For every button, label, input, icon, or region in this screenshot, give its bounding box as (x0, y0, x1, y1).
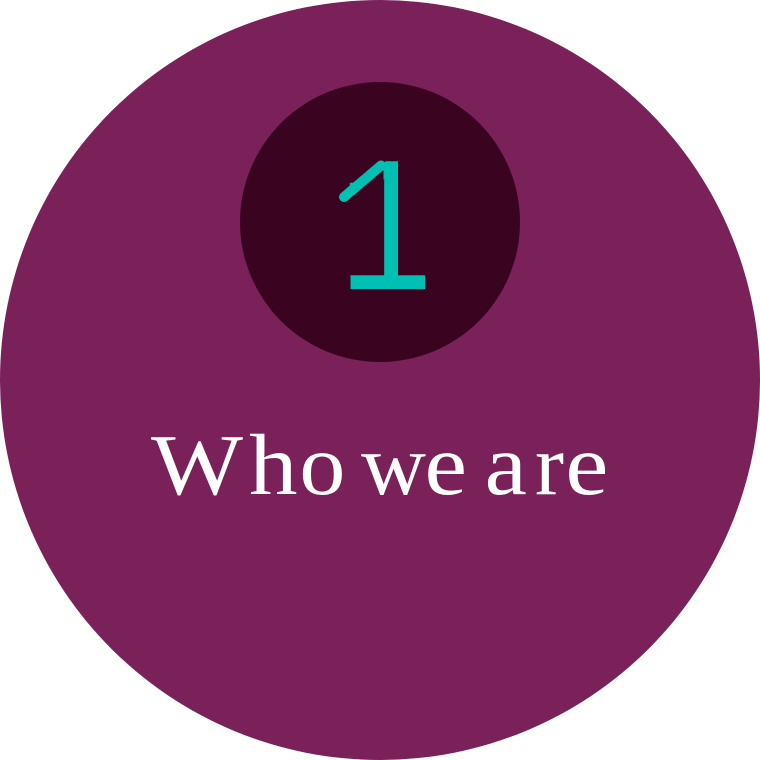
heading: W (151, 416, 243, 513)
heading: e (565, 416, 608, 513)
heading: a (485, 416, 527, 513)
heading: r (535, 416, 564, 513)
heading: e (424, 416, 467, 513)
heading: o (299, 416, 345, 513)
panel: dark number circle (240, 82, 520, 362)
number 1: 1 (338, 129, 433, 348)
heading: w (361, 416, 426, 513)
heading: h (249, 416, 298, 513)
